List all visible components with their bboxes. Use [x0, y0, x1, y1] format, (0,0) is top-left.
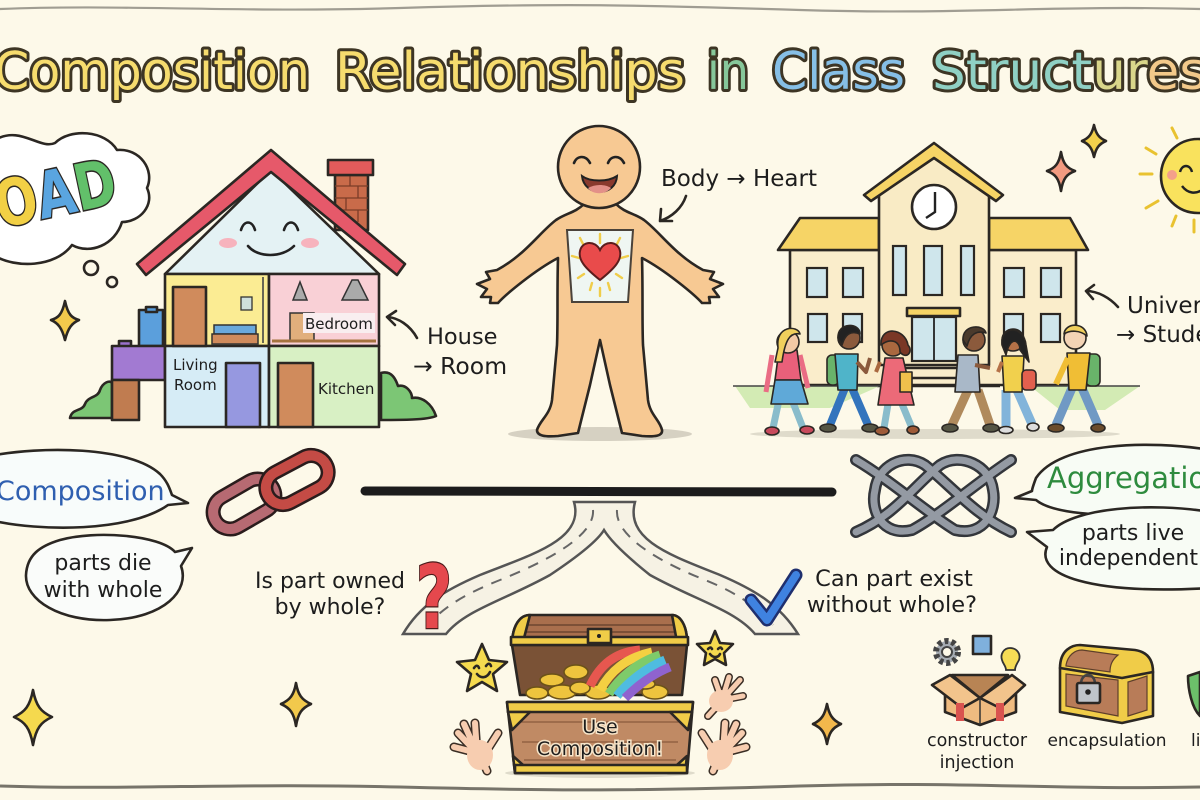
side furniture: [112, 307, 165, 420]
doors: [173, 287, 206, 346]
icon: constructor injection box: [932, 636, 1025, 725]
student 1: [765, 328, 814, 435]
wings: [790, 250, 1076, 385]
callout: composition: [0, 450, 188, 528]
student 4: [942, 327, 999, 432]
callout: parts live independently: parts live: [1082, 521, 1184, 546]
student 6: [1048, 325, 1105, 432]
rainbow: [590, 650, 670, 698]
room labels: Kitchen: [318, 380, 374, 398]
icon: stars: [457, 631, 733, 691]
icon: sparkles bottom: [14, 683, 841, 745]
room labels: [173, 315, 374, 398]
treasure chest: Composition!: [537, 738, 663, 760]
title: Class: [772, 42, 905, 102]
icon: sparkle left: [51, 301, 79, 340]
rooms: [165, 274, 269, 346]
student 2: [820, 325, 878, 432]
chimney: [328, 160, 373, 230]
label: body heart: Body → Heart: [661, 166, 817, 192]
callout: parts live independently: [1027, 507, 1200, 589]
house illustration: [70, 150, 436, 427]
label: encapsulation: encapsulation: [1047, 731, 1167, 751]
student 3: [875, 331, 919, 435]
body figure: [477, 126, 723, 441]
icon: question mark: ?: [416, 548, 452, 650]
callout: aggregation: [1015, 445, 1200, 515]
chest patch with heart: [567, 230, 633, 302]
title: [0, 42, 1200, 102]
title: Structures: [932, 42, 1200, 102]
room labels: Living: [173, 356, 218, 374]
icon: encapsulation chest: [1060, 645, 1153, 723]
students group: [750, 325, 1120, 439]
arrow: house to room: [387, 311, 417, 338]
icon: hands: [454, 677, 746, 771]
question: part owned: Is part owned: [255, 569, 405, 594]
bushes: [70, 382, 112, 418]
room labels: Bedroom: [305, 315, 373, 333]
icon: sun: [1140, 128, 1200, 232]
callout: parts die with whole: with whole: [44, 578, 162, 603]
question: exist without whole: Can part exist: [815, 566, 973, 592]
title: in: [707, 42, 749, 102]
chest body: [507, 702, 693, 773]
arrow: university to students: [1086, 285, 1118, 307]
school building: [733, 143, 1140, 410]
treasure chest: [505, 615, 695, 778]
attic: [165, 170, 379, 274]
question: part owned: by whole?: [275, 595, 385, 620]
face: [574, 157, 624, 193]
title: Relationships: [335, 42, 685, 102]
house face: [241, 222, 298, 255]
callout: composition: Composition: [0, 476, 165, 507]
steps: [870, 368, 1000, 386]
label: house room: → Room: [413, 352, 507, 380]
question: exist without whole: without whole?: [807, 592, 977, 618]
icon: chain links: [207, 449, 334, 535]
room labels: Room: [174, 376, 217, 394]
icon: check mark: [751, 575, 796, 620]
divider bar: [365, 491, 832, 492]
tower: [879, 155, 989, 365]
label: house room: House: [427, 324, 498, 350]
icon: sparkles right: [1047, 125, 1106, 191]
hand bottom right: [702, 723, 746, 771]
windows: [807, 246, 1061, 361]
roof: [137, 150, 405, 275]
clock: [912, 185, 956, 229]
forked road: [403, 502, 798, 634]
title: Composition: [0, 42, 310, 102]
icon: rope knot: [856, 460, 1011, 532]
arrow: body to heart: [660, 196, 686, 221]
icon: leaf cut off: [1188, 672, 1200, 716]
hand bottom left: [454, 723, 498, 771]
coins: [526, 665, 668, 699]
label: constructor injection: injection: [940, 753, 1014, 773]
thought bubble: LOAD: [0, 133, 149, 287]
lawn: [735, 386, 1140, 410]
label: constructor injection: constructor: [927, 731, 1028, 751]
callout: parts die with whole: parts die: [54, 551, 152, 576]
lid: [512, 615, 687, 642]
hand top right: [708, 677, 743, 716]
student 5: [998, 329, 1039, 434]
bed: [212, 297, 258, 344]
callout: parts die with whole: [26, 535, 192, 620]
lamps: [293, 280, 368, 300]
treasure chest: Use: [582, 716, 618, 738]
